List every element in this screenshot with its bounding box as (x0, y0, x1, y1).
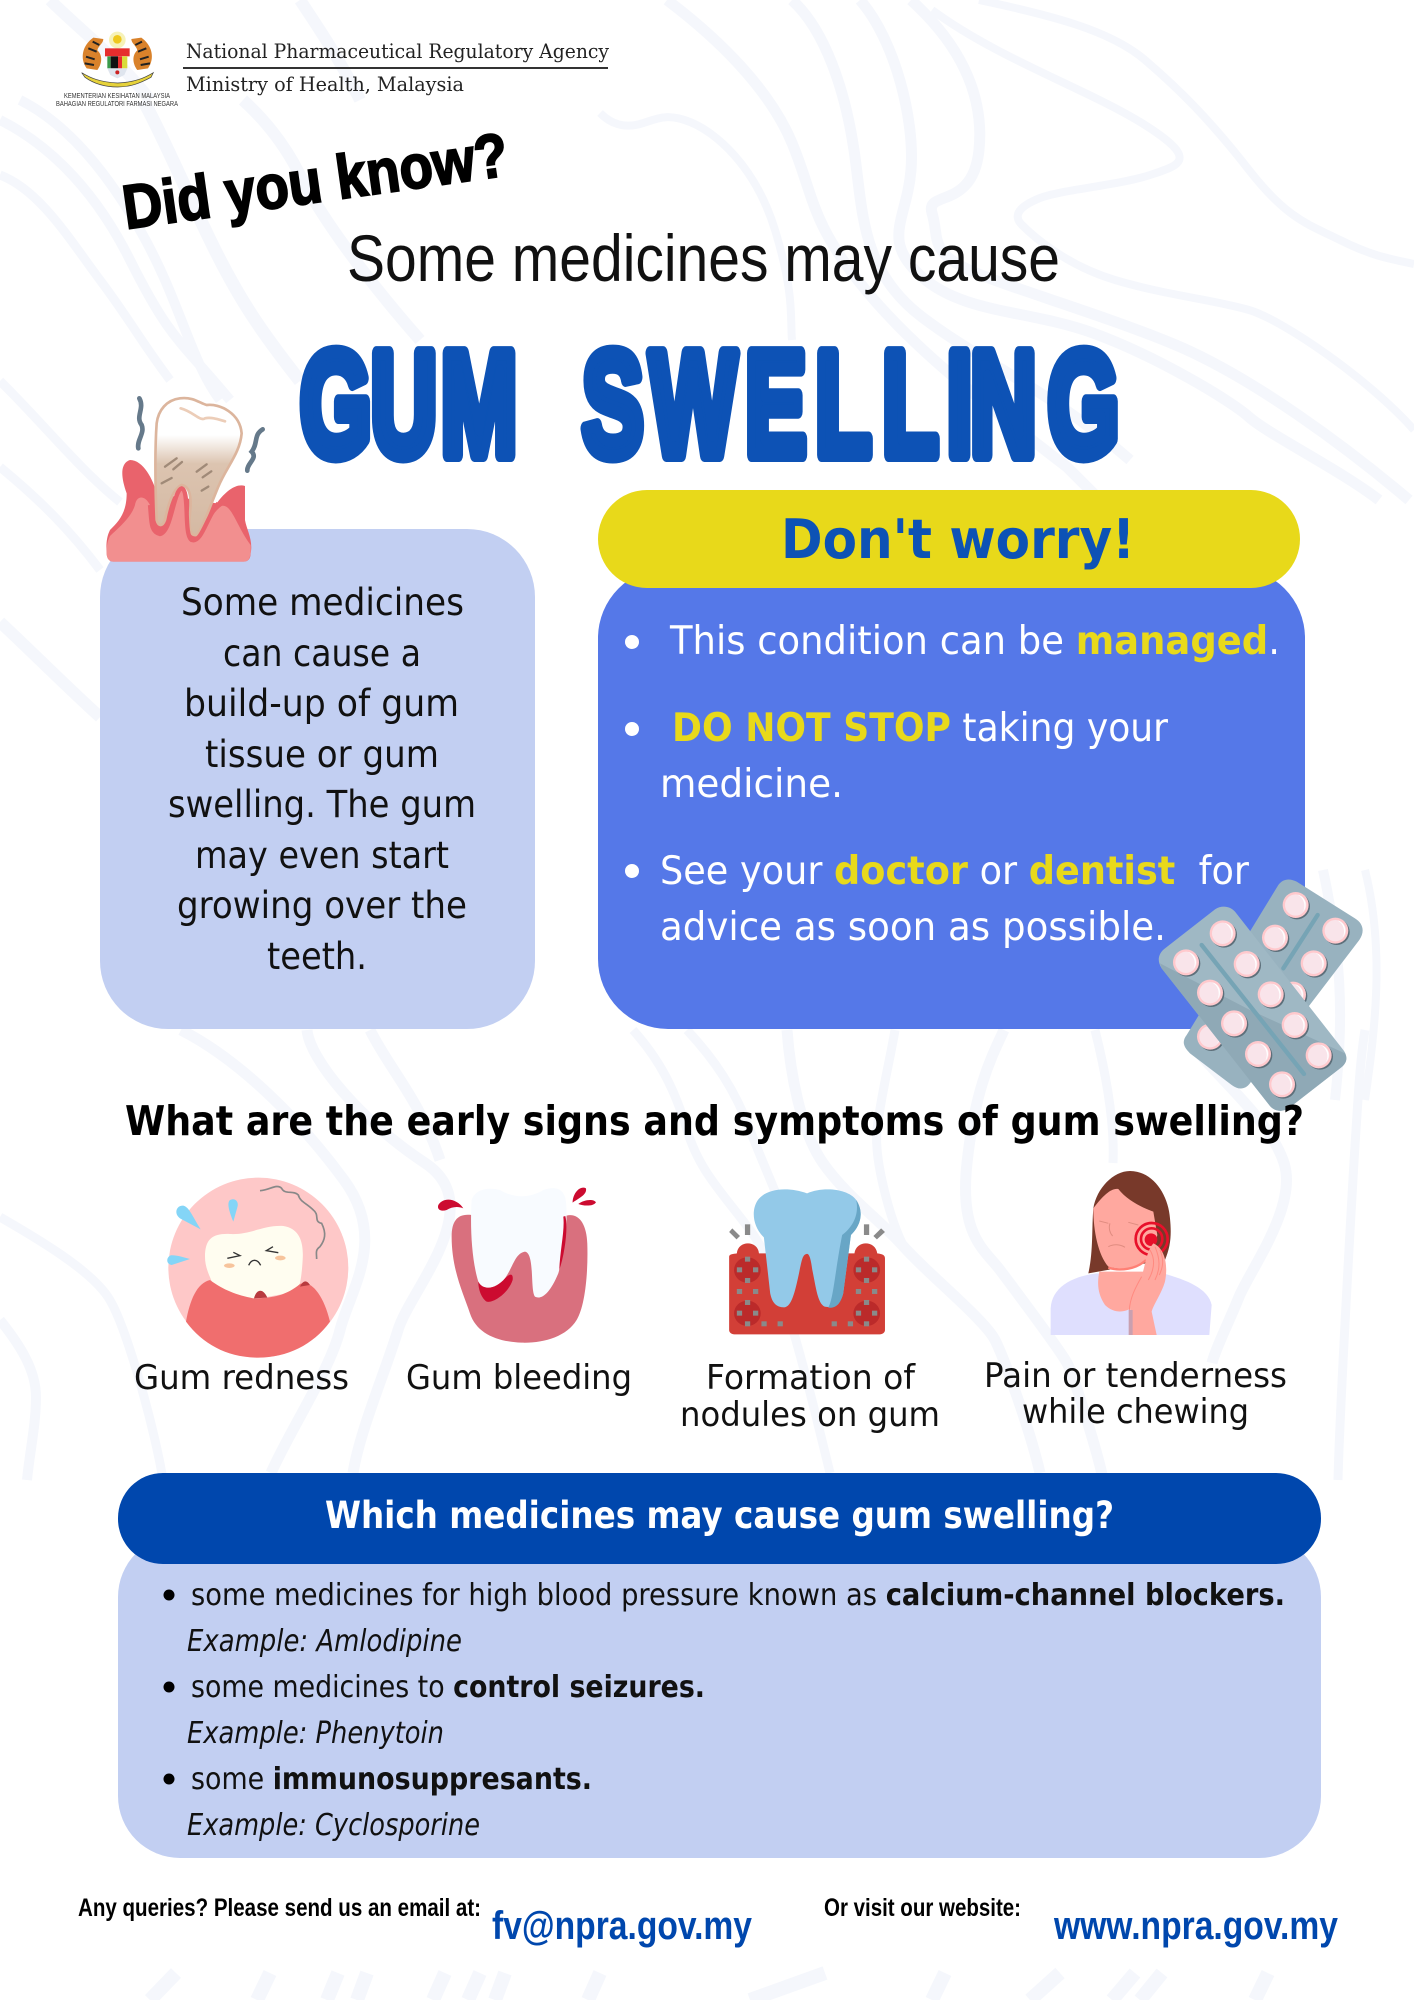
symptom: pain while chewing: while chewing (1022, 1392, 1249, 1432)
symptom: nodules on gum: nodules on gum (680, 1395, 940, 1435)
panel: which medicines: Example: Cyclosporine (187, 1808, 480, 1843)
panel: explanation (100, 529, 535, 1029)
panel: explanation: may even start (195, 834, 449, 877)
banner: which medicines heading: Which medicines may cause gum swelling? (325, 1494, 1114, 1537)
symptom: nodules on gum (680, 1189, 940, 1435)
symptom: gum redness (134, 1178, 349, 1398)
panel: don't worry advice: medicine. (660, 762, 843, 807)
icon: decayed tooth in swollen gum (106, 398, 263, 562)
subtitle: Some medicines may cause (347, 221, 1060, 295)
footer: contact details: Or visit our website: (824, 1894, 1021, 1922)
symptom: pain while chewing (984, 1171, 1287, 1432)
banner: don't worry (598, 490, 1300, 588)
panel: which medicines: some medicines to control seizures. (191, 1670, 705, 1705)
banner: which medicines heading (118, 1473, 1321, 1564)
panel: don't worry advice: See your doctor or dentist for (660, 849, 1250, 894)
header: agency name: Ministry of Health, Malaysia (186, 72, 464, 96)
panel: explanation: tissue or gum (205, 733, 439, 776)
footer: contact details: www.npra.gov.my (1053, 1904, 1339, 1948)
logo: Malaysian coat of arms with department name (56, 32, 178, 108)
footer: contact details: fv@npra.gov.my (492, 1904, 753, 1948)
footer: contact details: Any queries? Please send us an email at: (78, 1894, 481, 1922)
panel: explanation: build-up of gum (184, 682, 459, 725)
header: agency name: National Pharmaceutical Regulatory Agency (186, 39, 610, 63)
panel: don't worry advice: advice as soon as possible. (660, 905, 1166, 950)
panel: which medicines: Example: Amlodipine (187, 1624, 462, 1659)
header: agency name (183, 39, 610, 96)
panel: explanation: Some medicines (181, 581, 464, 624)
panel: explanation: can cause a (223, 632, 421, 675)
panel: which medicines: some medicines for high blood pressure known as calcium-channel blockers. (191, 1578, 1285, 1613)
symptom: nodules on gum: Formation of (706, 1358, 916, 1398)
panel: which medicines: some immunosuppresants. (191, 1762, 592, 1797)
panel: don't worry advice: DO NOT STOP taking your (672, 706, 1169, 751)
panel: don't worry advice (598, 490, 1305, 1029)
panel: explanation: teeth. (267, 935, 367, 978)
panel: don't worry advice: This condition can be managed. (669, 619, 1280, 664)
panel: which medicines (118, 1473, 1321, 1858)
symptom: gum bleeding: Gum bleeding (406, 1358, 632, 1398)
symptom: pain while chewing: Pain or tenderness (984, 1356, 1287, 1396)
title: gum swelling: GUM SWELLING (300, 323, 1119, 487)
heading: early signs and symptoms: What are the early signs and symptoms of gum swelling? (125, 1097, 1304, 1145)
logo: Malaysian coat of arms with department name: BAHAGIAN REGULATORI FARMASI NEGARA (56, 101, 178, 108)
panel: explanation: growing over the (177, 884, 467, 927)
panel: which medicines: Example: Phenytoin (187, 1716, 444, 1751)
banner: don't worry: Don't worry! (781, 508, 1135, 571)
footer: contact details (78, 1894, 1339, 1948)
icon: blister packs of pills (1159, 879, 1363, 1111)
logo: Malaysian coat of arms with department name: KEMENTERIAN KESIHATAN MALAYSIA (64, 93, 170, 100)
symptom: gum bleeding (406, 1188, 632, 1398)
symptom: gum redness: Gum redness (134, 1358, 349, 1398)
panel: explanation: swelling. The gum (168, 783, 476, 826)
heading: did you know: Did you know? (118, 121, 512, 243)
